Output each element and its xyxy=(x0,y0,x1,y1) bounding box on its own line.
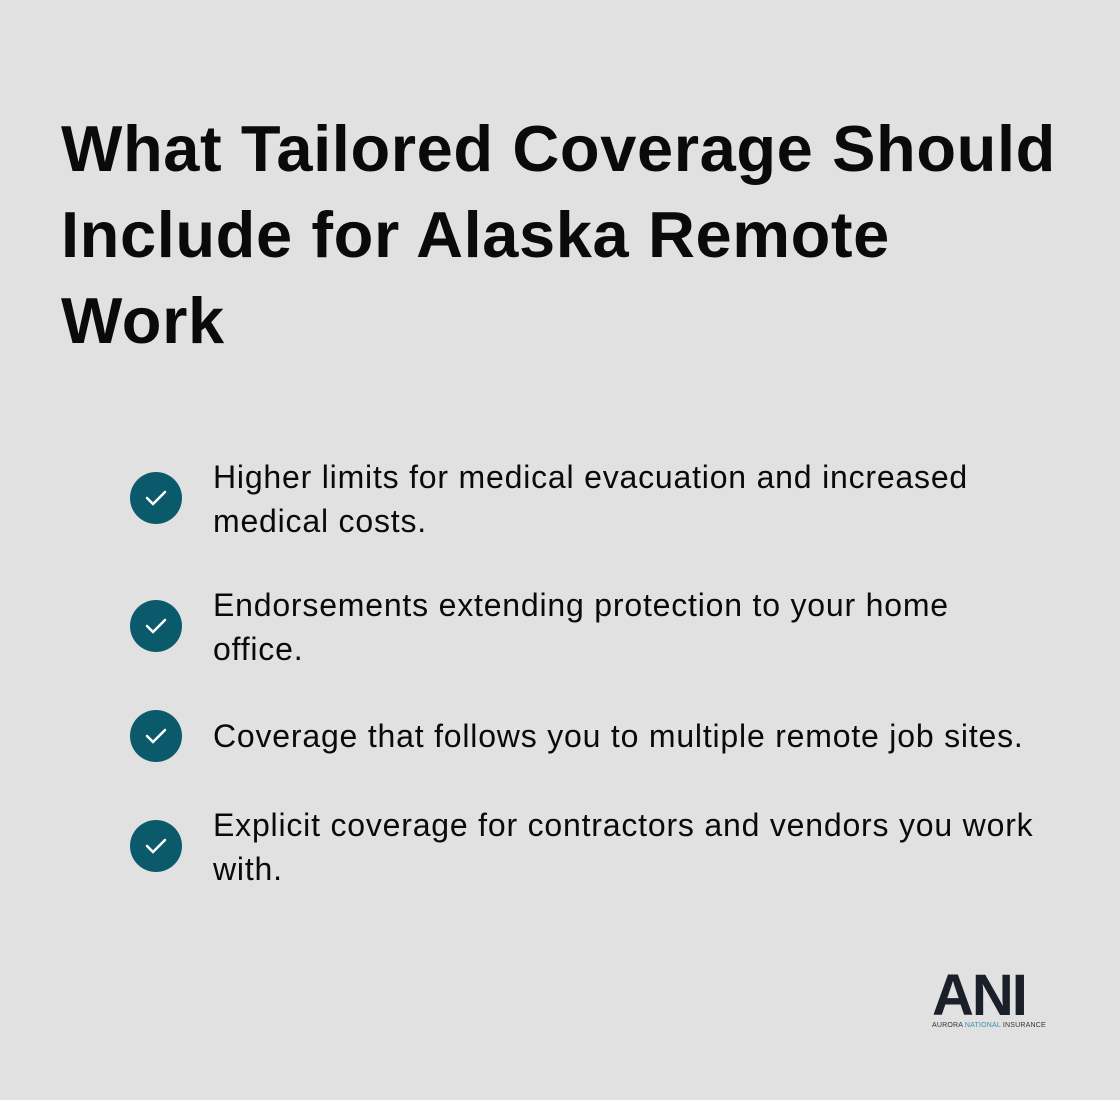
text: Explicit coverage for contractors and vendors you work xyxy=(213,807,1033,843)
text: medical costs. xyxy=(213,503,427,539)
title: Include for Alaska Remote xyxy=(61,198,890,271)
item 3 xyxy=(130,710,1024,762)
icon: check xyxy=(130,820,182,872)
text: Endorsements extending protection to your home xyxy=(213,587,949,623)
logo: ANI xyxy=(932,963,1026,1028)
title: What Tailored Coverage Should xyxy=(61,112,1056,185)
icon: check xyxy=(130,710,182,762)
icon: check xyxy=(130,600,182,652)
text: Coverage that follows you to multiple remote job sites. xyxy=(213,718,1024,754)
text: Higher limits for medical evacuation and increased xyxy=(213,459,968,495)
text: office. xyxy=(213,631,303,667)
text xyxy=(213,587,949,667)
item 1 xyxy=(130,459,968,539)
text xyxy=(213,807,1033,887)
text xyxy=(213,459,968,539)
icon: check xyxy=(130,472,182,524)
title: Work xyxy=(61,284,225,357)
item 2 xyxy=(130,587,949,667)
item 4 xyxy=(130,807,1033,887)
logo: AURORA NATIONAL INSURANCE xyxy=(932,1022,1046,1029)
title xyxy=(61,112,1056,357)
text: with. xyxy=(213,851,283,887)
